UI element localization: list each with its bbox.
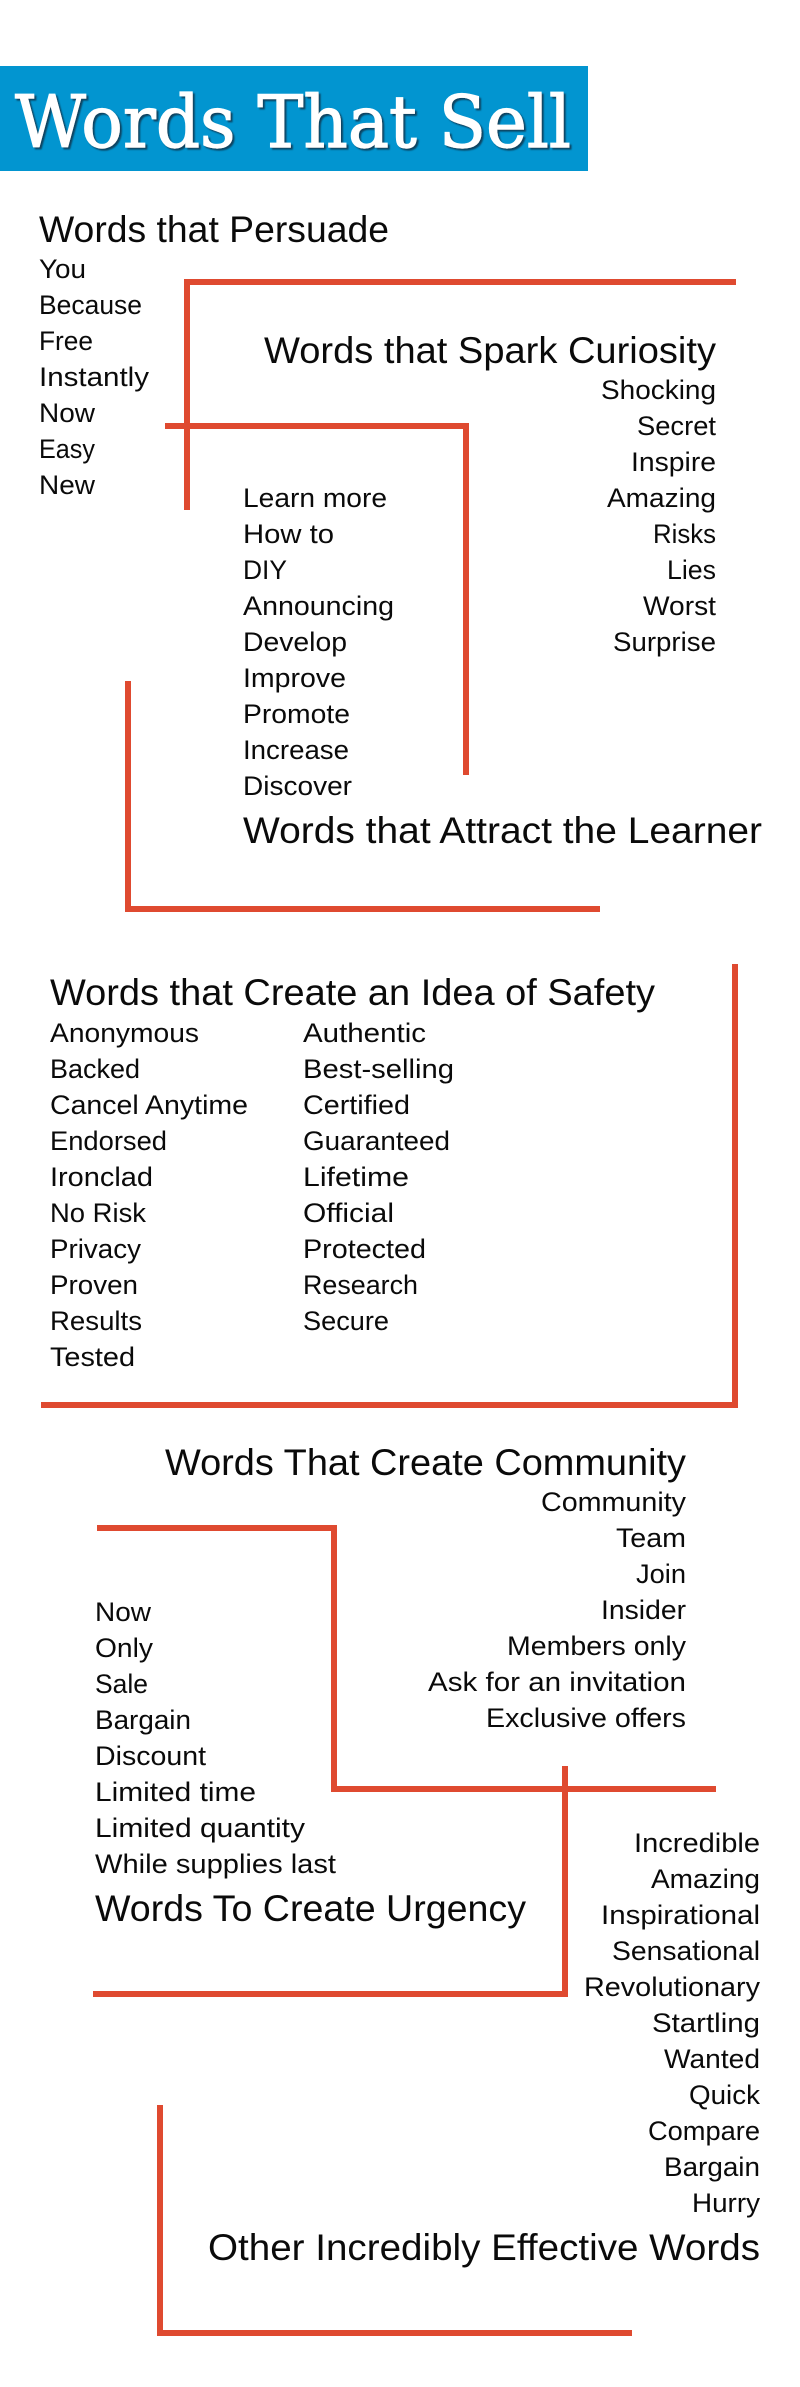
word list: community: Members only: [507, 1631, 687, 1661]
word list: urgency: Limited quantity: [95, 1813, 306, 1843]
word list: urgency: Discount: [95, 1741, 207, 1771]
word list: safety column 1: Ironclad: [50, 1162, 153, 1192]
word list: persuade: Easy: [39, 434, 95, 464]
line: other bracket: [157, 2105, 632, 2336]
word list: learner: Learn more: [243, 483, 387, 513]
word list: community: Exclusive offers: [486, 1703, 686, 1733]
word list: curiosity: Inspire: [631, 447, 716, 477]
title: Words That Sell: [15, 80, 571, 164]
word list: community: Join: [636, 1559, 686, 1589]
word list: safety column 2: Authentic: [303, 1018, 426, 1048]
word list: curiosity: Amazing: [607, 483, 716, 513]
word list: learner: Increase: [243, 735, 349, 765]
line: learner bottom bracket: [125, 681, 600, 912]
word list: persuade: New: [39, 470, 96, 500]
word list: curiosity: Lies: [667, 555, 716, 585]
word list: other: [584, 1828, 761, 2218]
word list: safety column 2: Lifetime: [303, 1162, 409, 1192]
word list: safety column 2: Best-selling: [303, 1054, 454, 1084]
panel: words that spark curiosity: [264, 330, 717, 657]
word list: learner: Develop: [243, 627, 347, 657]
word list: persuade: Free: [39, 326, 93, 356]
word list: safety column 1: Tested: [50, 1342, 135, 1372]
word list: safety column 1: Backed: [50, 1054, 140, 1084]
word list: learner: [243, 483, 394, 801]
word list: urgency: Limited time: [95, 1777, 256, 1807]
word list: curiosity: Surprise: [613, 627, 716, 657]
word list: curiosity: Secret: [637, 411, 716, 441]
word list: other: Quick: [689, 2080, 760, 2110]
word list: learner: DIY: [243, 555, 287, 585]
word list: urgency: Only: [95, 1633, 154, 1663]
word list: learner: Announcing: [243, 591, 394, 621]
word list: safety column 1: Anonymous: [50, 1018, 199, 1048]
heading: safety: Words that Create an Idea of Safety: [50, 972, 656, 1013]
word list: curiosity: [601, 375, 717, 657]
word list: safety column 2: Certified: [303, 1090, 410, 1120]
word list: community: Community: [541, 1487, 687, 1517]
line: curiosity bracket: [184, 279, 736, 510]
title banner: [0, 66, 588, 171]
heading: learner: Words that Attract the Learner: [243, 810, 762, 851]
word list: urgency: Bargain: [95, 1705, 191, 1735]
word list: urgency: [95, 1597, 337, 1879]
word list: safety column 1: Proven: [50, 1270, 138, 1300]
word list: safety column 2: Guaranteed: [303, 1126, 450, 1156]
panel: words that attract the learner: [243, 483, 762, 851]
word list: safety column 1: Results: [50, 1306, 142, 1336]
word list: safety column 2: Official: [303, 1198, 394, 1228]
word list: curiosity: Worst: [643, 591, 717, 621]
word list: other: Inspirational: [601, 1900, 760, 1930]
word list: community: Team: [616, 1523, 686, 1553]
word list: safety column 2: Research: [303, 1270, 418, 1300]
word list: urgency: Now: [95, 1597, 152, 1627]
line: safety bracket: [41, 964, 738, 1408]
word list: learner: How to: [243, 519, 334, 549]
word list: other: Revolutionary: [584, 1972, 761, 2002]
heading: other: Other Incredibly Effective Words: [208, 2227, 760, 2268]
word list: safety column 1: [50, 1018, 248, 1372]
panel: words that persuade: [39, 209, 389, 500]
word list: safety column 2: Secure: [303, 1306, 389, 1336]
word list: safety column 2: [303, 1018, 454, 1336]
panel: words to create urgency: [95, 1597, 527, 1929]
word list: other: Compare: [648, 2116, 760, 2146]
line: community bracket: [97, 1525, 716, 1792]
word list: safety column 1: Endorsed: [50, 1126, 167, 1156]
word list: community: Ask for an invitation: [428, 1667, 686, 1697]
line: learner top bracket: [165, 423, 469, 775]
panel: other incredibly effective words: [208, 1828, 761, 2268]
word list: persuade: Because: [39, 290, 142, 320]
word list: learner: Improve: [243, 663, 346, 693]
word list: urgency: Sale: [95, 1669, 148, 1699]
heading: persuade: Words that Persuade: [39, 209, 389, 250]
word list: persuade: Now: [39, 398, 96, 428]
word list: safety column 1: Privacy: [50, 1234, 142, 1264]
word list: community: Insider: [601, 1595, 686, 1625]
heading: community: Words That Create Community: [165, 1442, 687, 1483]
word list: other: Amazing: [651, 1864, 760, 1894]
word list: other: Hurry: [692, 2188, 761, 2218]
word list: curiosity: Shocking: [601, 375, 716, 405]
word list: learner: Promote: [243, 699, 350, 729]
line: urgency bracket: [93, 1766, 568, 1997]
word list: persuade: [39, 254, 150, 500]
word list: learner: Discover: [243, 771, 352, 801]
heading: urgency: Words To Create Urgency: [95, 1888, 527, 1929]
word list: urgency: While supplies last: [95, 1849, 337, 1879]
word list: community: [428, 1487, 687, 1733]
word list: curiosity: Risks: [653, 519, 716, 549]
word list: persuade: You: [39, 254, 86, 284]
word list: safety column 1: No Risk: [50, 1198, 147, 1228]
word list: other: Incredible: [634, 1828, 760, 1858]
word list: other: Wanted: [664, 2044, 760, 2074]
word list: other: Sensational: [612, 1936, 760, 1966]
word list: safety column 2: Protected: [303, 1234, 426, 1264]
word list: other: Bargain: [664, 2152, 760, 2182]
word list: persuade: Instantly: [39, 362, 150, 392]
panel: words that create community: [165, 1442, 687, 1733]
word list: other: Startling: [652, 2008, 760, 2038]
heading: curiosity: Words that Spark Curiosity: [264, 330, 717, 371]
panel: words that create an idea of safety: [50, 972, 656, 1372]
word list: safety column 1: Cancel Anytime: [50, 1090, 248, 1120]
